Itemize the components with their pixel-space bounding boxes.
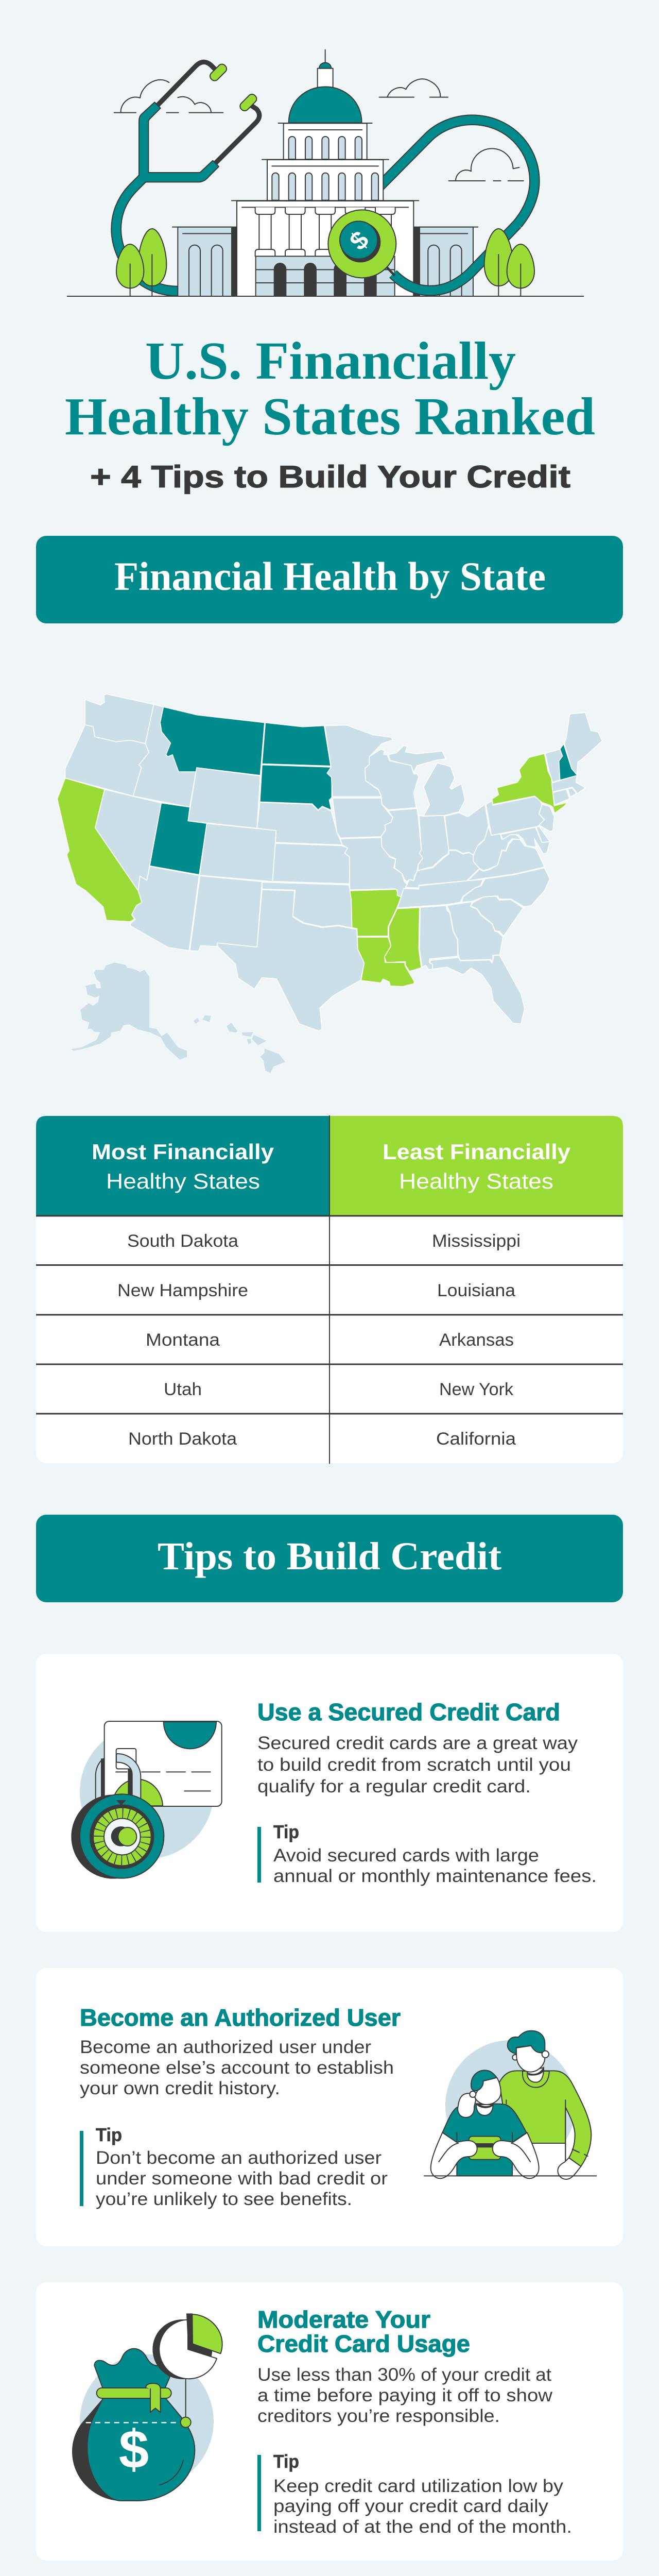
clouds (114, 79, 524, 181)
most healthy states list: New Hampshire (117, 1281, 248, 1300)
body text: Become an authorized user under (80, 2037, 371, 2057)
tip callout: under someone with bad credit or (96, 2168, 388, 2189)
right annex building (413, 227, 478, 296)
header: least financially healthy: Least Financially (383, 1140, 571, 1164)
most healthy states list: North Dakota (128, 1429, 237, 1449)
stethoscope lower tube (393, 224, 517, 291)
panel: moderate your credit card usage (36, 2282, 623, 2561)
panel: use a secured credit card (36, 1654, 623, 1932)
title: U.S. Financially (145, 331, 516, 391)
body text: your own credit history. (80, 2078, 280, 2098)
tip callout: Tip (96, 2124, 122, 2145)
tip callout (80, 2124, 388, 2209)
body text (257, 1733, 578, 1797)
icon: two people with a credit card (424, 2031, 596, 2179)
heading: Credit Card Usage (257, 2330, 470, 2357)
tip callout: instead of at the end of the month. (273, 2517, 572, 2537)
body text: creditors you’re responsible. (257, 2406, 500, 2426)
heading: Use a Secured Credit Card (257, 1699, 560, 1725)
icon: money bag and pie chart (72, 2313, 222, 2501)
most healthy states list: Montana (146, 1330, 220, 1350)
tip callout: annual or monthly maintenance fees. (273, 1866, 597, 1886)
least healthy states list: Louisiana (437, 1281, 515, 1300)
tip callout (257, 2451, 572, 2537)
title: Healthy States Ranked (65, 387, 595, 446)
tip callout: you’re unlikely to see benefits. (96, 2189, 352, 2209)
heading: Moderate Your (257, 2306, 430, 2333)
section heading: Tips to Build Credit (36, 1515, 623, 1602)
section heading: Tips to Build Credit: Tips to Build Credit (158, 1535, 501, 1578)
body text: Secured credit cards are a great way (257, 1733, 578, 1753)
heading: Become an Authorized User (80, 2004, 401, 2031)
tip callout (257, 1821, 597, 1886)
header: most financially healthy: Healthy States (106, 1169, 260, 1193)
tip callout: Tip (273, 2451, 299, 2472)
body text: qualify for a regular credit card. (257, 1776, 531, 1797)
most healthy states list: South Dakota (127, 1231, 238, 1251)
body text (257, 2365, 553, 2426)
trees (116, 229, 534, 296)
least healthy states list (432, 1231, 521, 1449)
stethoscope tubes (116, 62, 534, 291)
tip callout: paying off your credit card daily (273, 2496, 549, 2516)
ground line (67, 295, 583, 298)
body text: someone else’s account to establish (80, 2058, 394, 2078)
tip callout: Keep credit card utilization low by (273, 2476, 564, 2496)
header: most financially healthy (36, 1116, 330, 1216)
left annex building (172, 227, 237, 296)
body text: to build credit from scratch until you (257, 1755, 571, 1775)
tip callout: Avoid secured cards with large (273, 1845, 539, 1866)
panel: become an authorized user (36, 1968, 623, 2246)
section heading: Financial Health by State (36, 536, 623, 623)
most healthy states list: Utah (164, 1380, 202, 1399)
body text: a time before paying it off to show (257, 2385, 553, 2405)
tip callout: Don’t become an authorized user (96, 2148, 381, 2168)
least healthy states list: California (436, 1429, 516, 1449)
body text (80, 2037, 394, 2098)
capitol building (232, 50, 419, 296)
US map (57, 694, 602, 1073)
section heading: Financial Health by State: Financial Health by State (114, 554, 546, 599)
header: most financially healthy: Most Financially (92, 1140, 274, 1164)
header: least financially healthy: Healthy States (399, 1169, 553, 1193)
tip callout: Tip (273, 1821, 299, 1842)
header: least financially healthy (330, 1116, 623, 1216)
most healthy states list (117, 1231, 248, 1449)
least healthy states list: Arkansas (439, 1330, 514, 1350)
comparison table (36, 1115, 623, 1464)
hero illustration: capitol with stethoscope (67, 50, 583, 296)
icon: money bag and pie chart: $ (119, 2419, 149, 2480)
least healthy states list: New York (439, 1380, 514, 1399)
icon: credit card and padlock (71, 1721, 222, 1879)
heading (257, 2306, 470, 2357)
body text: Use less than 30% of your credit at (257, 2365, 551, 2385)
least healthy states list: Mississippi (432, 1231, 521, 1251)
title (65, 331, 595, 446)
magnifier with dollar sign: $ (344, 225, 374, 256)
subtitle: + 4 Tips to Build Your Credit (90, 460, 570, 494)
magnifier with dollar sign (328, 210, 396, 278)
